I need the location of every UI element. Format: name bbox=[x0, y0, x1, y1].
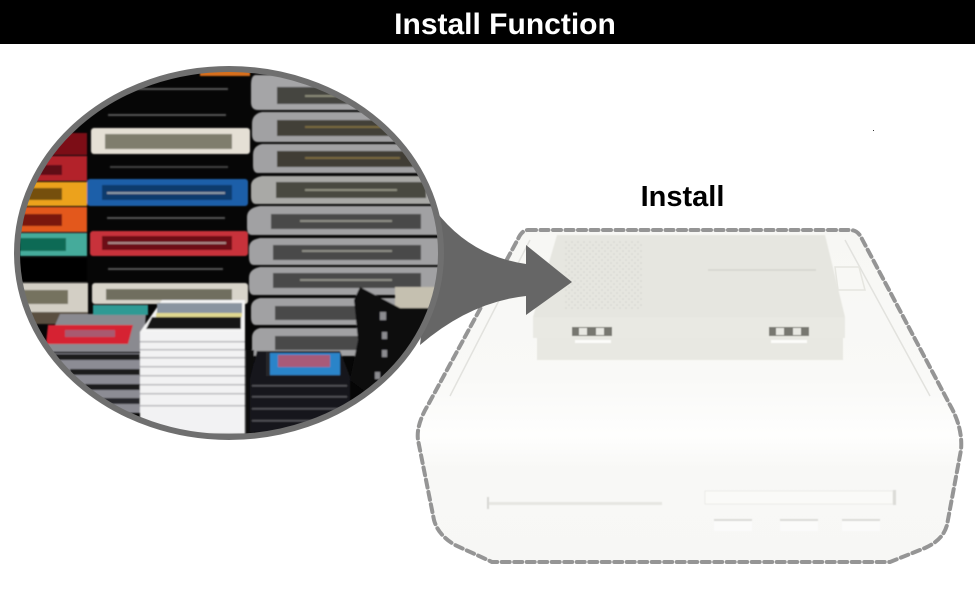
front slots and ports bbox=[487, 490, 896, 531]
lower left cartridge stack bbox=[28, 312, 146, 413]
middle column cartridges bbox=[87, 88, 250, 304]
title bar bbox=[0, 0, 975, 44]
device with dashed outline bbox=[418, 230, 961, 562]
device body bbox=[418, 230, 961, 562]
black cartridge stack bbox=[246, 350, 350, 435]
add-on module bbox=[533, 235, 845, 360]
arrow bbox=[420, 210, 572, 345]
latch left bbox=[572, 327, 612, 343]
magnified circle of cartridges bbox=[17, 69, 442, 437]
add-on tab bbox=[835, 267, 865, 290]
left column cartridges bbox=[20, 133, 88, 313]
title bar: Install Function bbox=[394, 8, 616, 41]
speck bbox=[873, 130, 874, 131]
white cartridge stack bbox=[93, 300, 245, 434]
orange strip at top bbox=[199, 72, 251, 77]
right column cartridges bbox=[247, 75, 442, 356]
top panel edges bbox=[450, 240, 930, 396]
circle border bbox=[17, 69, 441, 437]
latch right bbox=[769, 327, 809, 343]
install label: Install bbox=[641, 181, 724, 213]
black cartridges on right bbox=[350, 286, 434, 382]
